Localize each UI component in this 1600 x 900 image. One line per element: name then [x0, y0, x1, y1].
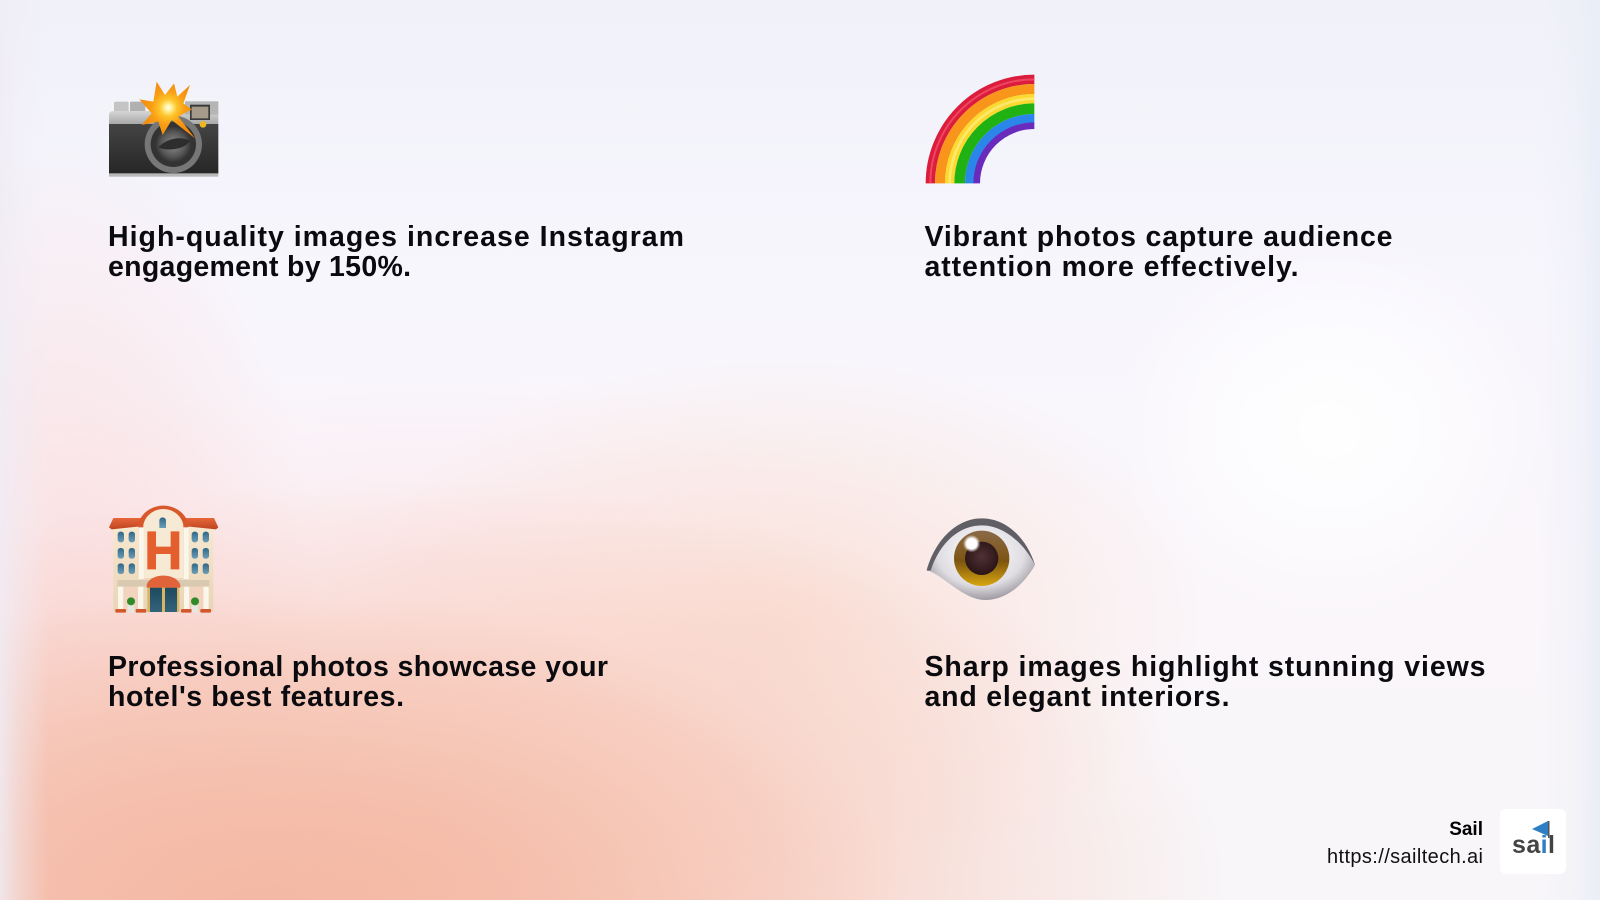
- text: sharp images: Sharp images highlight stunning views: [924, 651, 1486, 683]
- card: camera tip: [108, 82, 684, 283]
- text: vibrant photos: Vibrant photos capture audience: [924, 221, 1392, 253]
- card: hotel tip: [108, 506, 608, 713]
- brand name: Sail: [1449, 819, 1483, 840]
- brand footer: [1327, 809, 1566, 874]
- logo tile: [1500, 809, 1566, 874]
- icon: rainbow: [930, 79, 1034, 183]
- text: vibrant photos: attention more effectively.: [924, 251, 1298, 283]
- text: professional photos: hotel's best features.: [108, 681, 404, 713]
- text: professional photos: [108, 651, 608, 713]
- text: sharp images: and elegant interiors.: [924, 681, 1230, 713]
- card: eye tip: [924, 518, 1486, 713]
- icon: eye: [927, 518, 1035, 600]
- logo tile: sail: [1512, 831, 1555, 859]
- icon: hotel building: [109, 506, 218, 613]
- icon: camera with flash: [109, 82, 218, 177]
- text: engagement: High-quality images increase Instagram: [108, 221, 684, 253]
- text: vibrant photos: [924, 221, 1392, 283]
- brand url: https://sailtech.ai: [1327, 846, 1483, 868]
- text: engagement: engagement by 150%.: [108, 251, 411, 283]
- text: professional photos: Professional photos showcase your: [108, 651, 608, 683]
- card: rainbow tip: [924, 79, 1392, 283]
- text: sharp images: [924, 651, 1486, 713]
- text: engagement: [108, 221, 684, 283]
